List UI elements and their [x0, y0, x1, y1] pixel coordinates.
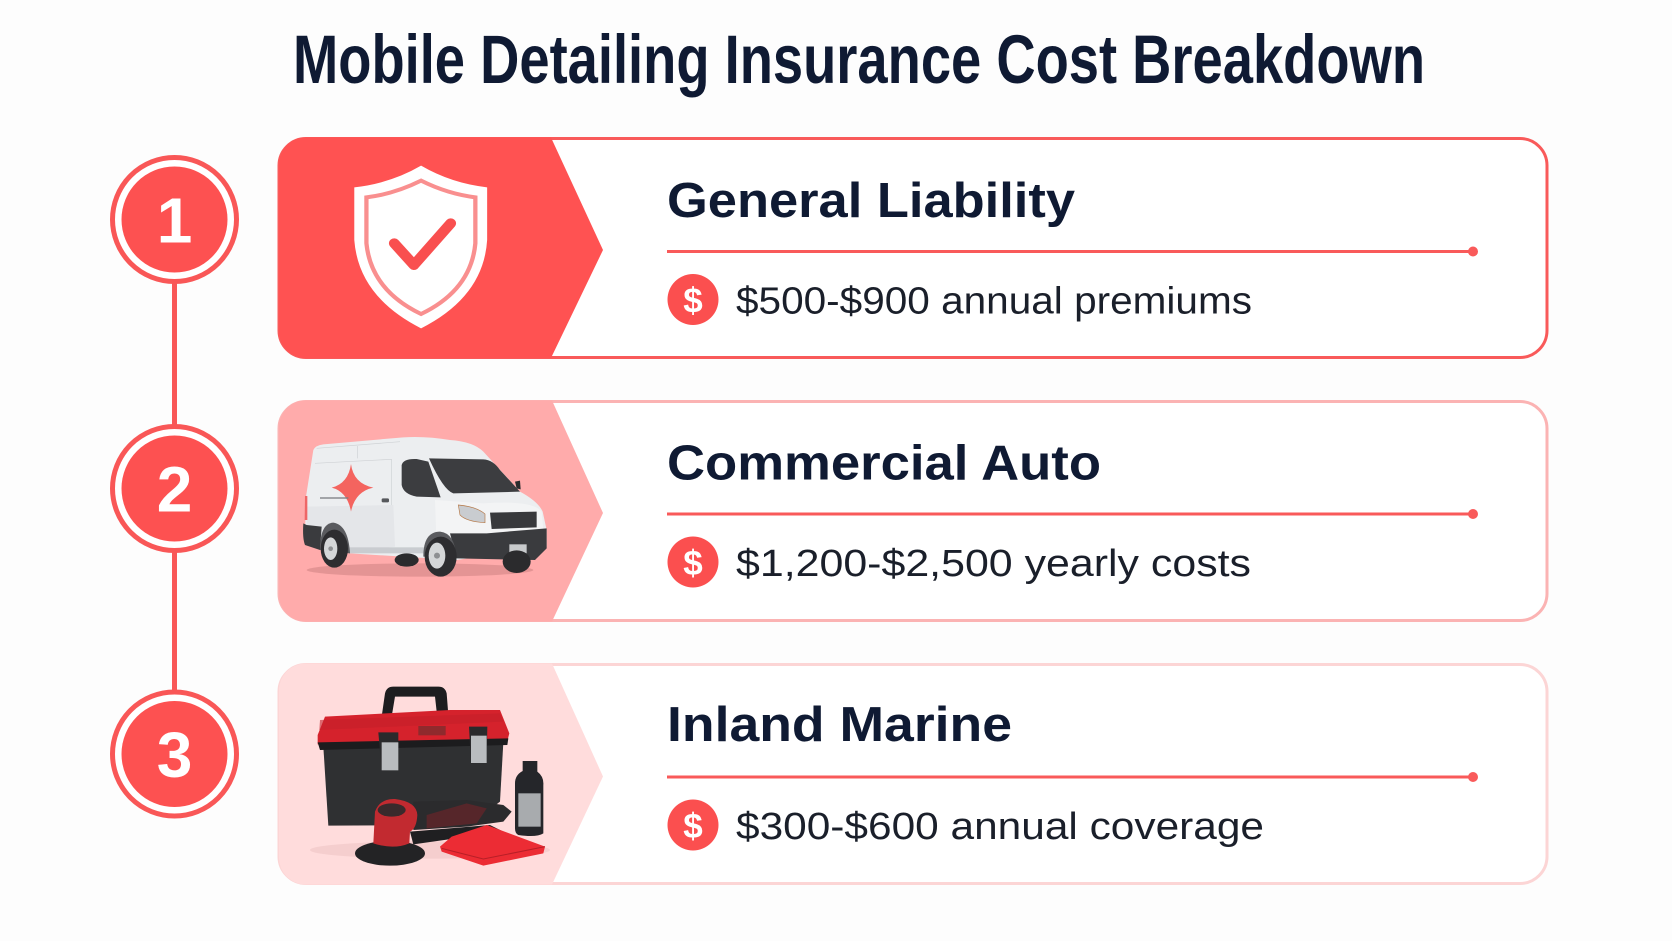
icon: dollar coin: $ [683, 807, 703, 846]
timeline connector [172, 220, 177, 754]
heading: commercial auto: Commercial Auto [667, 436, 1101, 490]
price: inland marine: $300-$600 annual coverage [736, 806, 1264, 848]
icon: dollar coin: $ [683, 544, 703, 583]
divider with end dot [667, 509, 1478, 519]
price: general liability: $500-$900 annual premiums [736, 280, 1252, 322]
icon: dollar coin: $ [683, 282, 703, 320]
icon: shield with check [354, 166, 487, 328]
panel: inland marine [279, 664, 1547, 884]
step badge 3 [112, 692, 236, 816]
step badge 1: 1 [157, 184, 192, 256]
price: commercial auto: $1,200-$2,500 yearly costs [736, 543, 1251, 585]
divider with end dot [667, 772, 1478, 782]
panel: commercial auto [279, 400, 1547, 622]
panel: general liability [279, 138, 1547, 358]
icon: dollar coin [668, 800, 718, 850]
step badge 2: 2 [157, 454, 192, 526]
illustration: toolbox and polisher [310, 687, 550, 866]
divider with end dot [667, 246, 1478, 256]
heading: inland marine: Inland Marine [667, 698, 1012, 752]
icon: dollar coin [668, 274, 718, 325]
step badge 3: 3 [157, 719, 192, 791]
icon: dollar coin [668, 536, 718, 588]
heading: general liability: General Liability [667, 174, 1075, 228]
illustration: white van [303, 437, 547, 577]
step badge 2 [112, 426, 236, 550]
step badge 1 [112, 158, 236, 282]
